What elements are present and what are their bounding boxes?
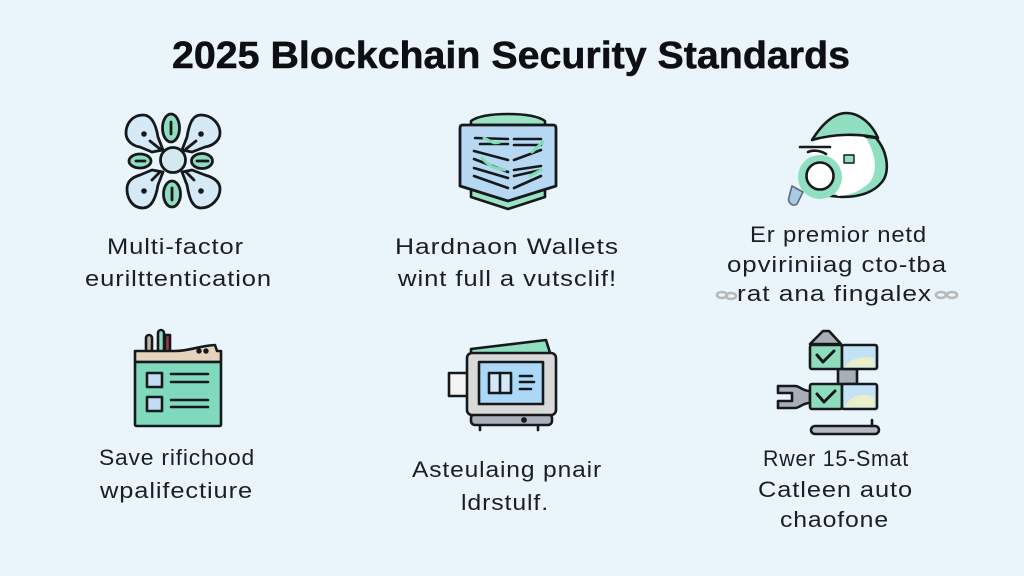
label: line three: rat ana fingalex — [737, 281, 932, 306]
title: 2025 Blockchain Security Standards — [172, 35, 850, 77]
icon: shield book — [460, 114, 556, 209]
icon: check blocks and wrench — [778, 331, 879, 434]
panel: save qualifications — [99, 330, 255, 503]
panel: pair standards — [412, 340, 602, 515]
label: line one: Asteulaing pnair — [412, 457, 602, 482]
panel: premier audits — [717, 113, 957, 306]
panel: smart contract checks — [758, 331, 913, 532]
icon: network flower — [126, 114, 220, 208]
label: line one: Er premior netd — [750, 222, 927, 247]
label: line two: opviriniiag cto-tba — [727, 252, 947, 277]
label: subtitle: wint full a vutsclif! — [397, 266, 617, 291]
panel: hardware wallets — [395, 114, 619, 291]
label: line two: wpalifectiure — [99, 478, 253, 503]
label: line two: ldrstulf. — [461, 490, 549, 515]
label: authentication: eurilttentication — [85, 266, 272, 291]
icon: dome and magnifier — [789, 113, 887, 205]
label: multi-factor: Multi-factor — [107, 234, 244, 259]
label: line two: Catleen auto — [758, 477, 913, 502]
icon: checklist folder — [135, 330, 221, 426]
label: hardware wallets: Hardnaon Wallets — [395, 234, 619, 259]
decorative chain marks — [717, 292, 957, 299]
label: line three: chaofone — [780, 507, 889, 532]
label: line one: Save rifichood — [99, 445, 255, 470]
icon: device with screen — [449, 340, 556, 430]
panel: multi-factor authentication — [85, 114, 272, 291]
label: line one: Rwer 15-Smat — [763, 446, 909, 471]
